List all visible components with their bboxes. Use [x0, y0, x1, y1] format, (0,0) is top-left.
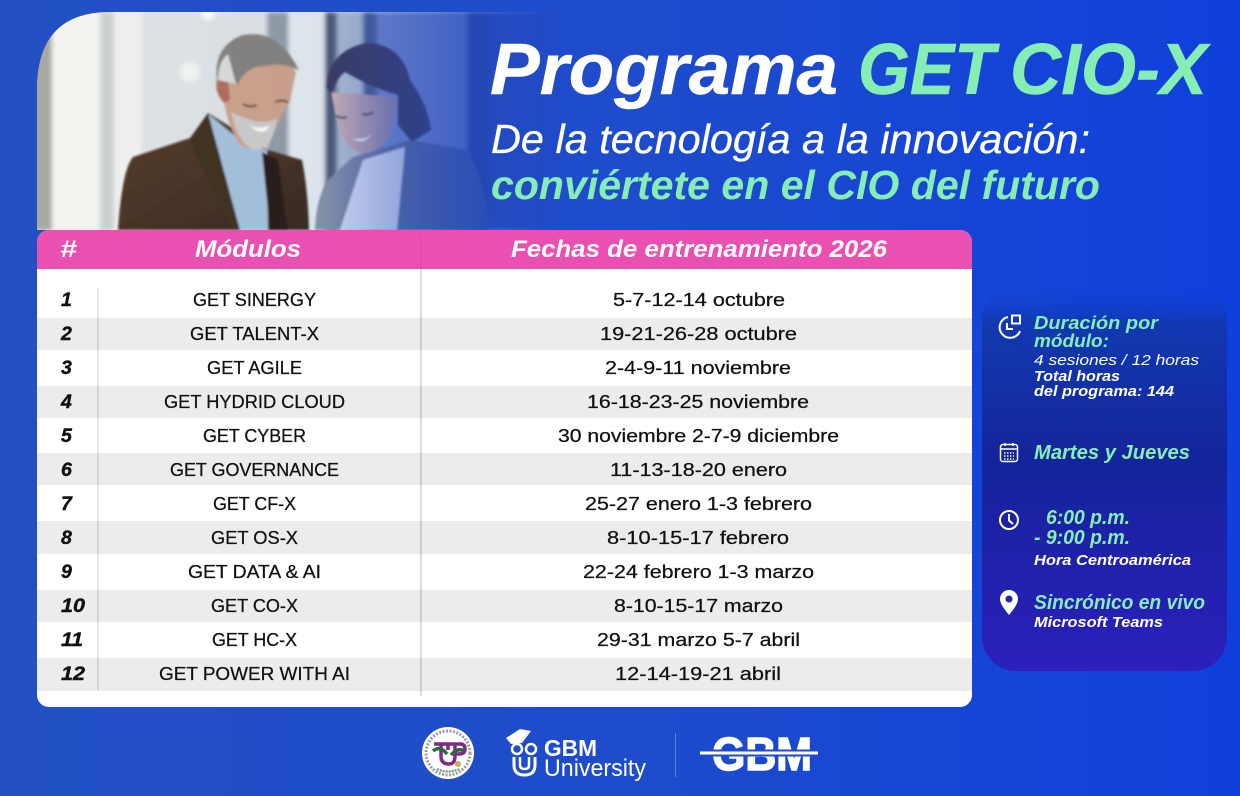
logo: GBM University: University [544, 755, 646, 782]
module names: GET POWER WITH AI [159, 663, 350, 684]
training dates: 30 noviembre 2-7-9 diciembre [558, 425, 839, 446]
training dates: 2-4-9-11 noviembre [605, 357, 791, 378]
panel: program details [982, 285, 1227, 671]
subtitle [491, 116, 1100, 208]
training dates [558, 289, 839, 684]
row numbers: 1 [61, 289, 72, 311]
title: Programa [490, 30, 838, 110]
woman shirt [340, 147, 405, 230]
module names: GET TALENT-X [190, 323, 319, 344]
table header: Módulos [195, 236, 301, 263]
duration text: Total horas [1034, 368, 1120, 385]
module names: GET OS-X [211, 527, 298, 548]
man neck and face [223, 64, 298, 150]
icon: duration pie [1000, 316, 1020, 338]
logo: GBM University: GBM [544, 735, 597, 761]
row numbers: 2 [60, 323, 72, 345]
duration text: módulo: [1034, 331, 1109, 351]
man jacket [118, 113, 309, 230]
modality text: Microsoft Teams [1034, 614, 1163, 631]
table header: # [60, 236, 78, 263]
training dates: 11-13-18-20 enero [610, 459, 787, 480]
icon: calendar [1000, 443, 1018, 462]
module names [159, 289, 350, 684]
module names: GET CYBER [203, 425, 306, 446]
row numbers: 10 [61, 595, 85, 617]
subtitle: De la tecnología a la innovación: [491, 116, 1090, 162]
module names: GET HYDRID CLOUD [164, 391, 345, 412]
module names: GET HC-X [212, 629, 297, 650]
man lapels [190, 113, 240, 230]
training dates: 8-10-15-17 febrero [607, 527, 789, 548]
logo: GBM: GBM [712, 728, 812, 780]
table header: Fechas de entrenamiento 2026 [511, 236, 888, 263]
man beard [231, 112, 277, 150]
icon: location pin [1000, 590, 1018, 615]
training dates: 12-14-19-21 abril [615, 663, 781, 684]
time text: Hora Centroamérica [1034, 552, 1191, 569]
row numbers: 7 [61, 493, 73, 515]
training dates: 29-31 marzo 5-7 abril [597, 629, 800, 650]
icon: clock [1000, 511, 1018, 529]
subtitle: conviértete en el CIO del futuro [491, 162, 1100, 208]
icon: owl with graduation cap [506, 729, 536, 775]
table header [37, 230, 972, 269]
module names: GET CF-X [213, 493, 296, 514]
training dates: 8-10-15-17 marzo [614, 595, 783, 616]
row numbers: 4 [60, 391, 72, 413]
time text: 6:00 p.m. [1046, 507, 1130, 529]
training dates: 19-21-26-28 octubre [600, 323, 797, 344]
title: CIO-X [1010, 30, 1211, 110]
time text [1034, 507, 1191, 569]
module names: GET CO-X [211, 595, 298, 616]
photo: executives looking at a tablet [30, 6, 560, 230]
training dates: 22-24 febrero 1-3 marzo [583, 561, 814, 582]
time text: - 9:00 p.m. [1034, 527, 1130, 549]
module names: GET DATA & AI [188, 561, 321, 582]
woman face [331, 92, 397, 153]
duration text: del programa: 144 [1034, 383, 1175, 400]
table: modules and training dates [37, 230, 972, 707]
title: GET [858, 30, 1001, 110]
row numbers: 3 [61, 357, 72, 379]
training dates: 5-7-12-14 octubre [613, 289, 785, 310]
row numbers: 6 [61, 459, 72, 481]
modality text [1034, 592, 1205, 631]
man hair [216, 34, 299, 84]
woman hair [327, 43, 431, 142]
modality text: Sincrónico en vivo [1034, 592, 1205, 614]
module names: GET AGILE [207, 357, 302, 378]
logo: GBM University [506, 729, 646, 782]
row numbers: 11 [61, 629, 83, 651]
row numbers: 8 [61, 527, 72, 549]
man smile [250, 125, 270, 132]
training dates: 16-18-23-25 noviembre [587, 391, 809, 412]
row numbers: 9 [61, 561, 72, 583]
divider [675, 733, 676, 777]
module names: GET SINERGY [193, 289, 316, 310]
duration text: 4 sesiones / 12 horas [1034, 352, 1200, 369]
man shirt [207, 113, 268, 230]
duration text [1034, 313, 1200, 400]
woman smile [352, 134, 372, 142]
row numbers: 12 [61, 663, 85, 685]
training dates: 25-27 enero 1-3 febrero [585, 493, 812, 514]
logo: UTP seal [422, 727, 474, 779]
row numbers: 5 [61, 425, 73, 447]
title [490, 30, 1211, 110]
row numbers [60, 289, 85, 685]
duration text: Duración por [1034, 313, 1159, 333]
module names: GET GOVERNANCE [170, 459, 339, 480]
schedule days: Martes y Jueves [1034, 442, 1190, 464]
woman jacket [315, 140, 490, 230]
